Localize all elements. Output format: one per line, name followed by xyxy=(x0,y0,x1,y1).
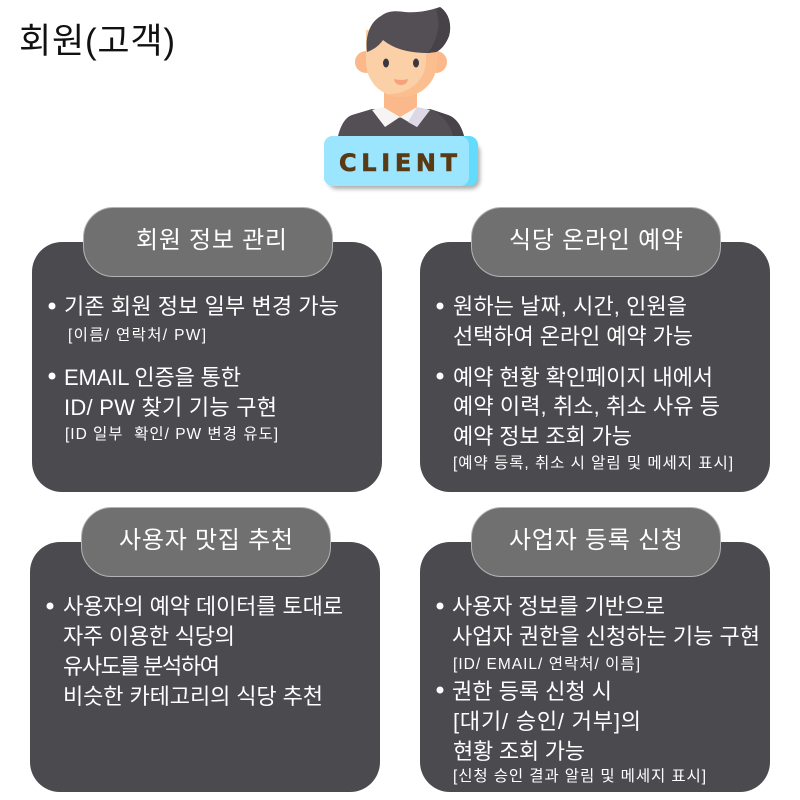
text block: business authority request: 사업자 권한을 신청하는 기능 구현 xyxy=(452,624,760,649)
panel background xyxy=(420,542,770,792)
text block: request status xyxy=(436,679,706,785)
badge shadow xyxy=(328,143,480,189)
text block: booking status: 예약 현황 확인페이지 내에서 xyxy=(453,365,713,390)
text block: online booking: 선택하여 온라인 예약 가능 xyxy=(453,324,693,349)
text block: recommendation: 사용자의 예약 데이터를 토대로 xyxy=(63,594,343,619)
text block: profile editing: [이름/ 연락처/ PW] xyxy=(68,326,206,344)
text block: booking status xyxy=(436,365,733,472)
text block: email verification: [ID 일부 확인/ PW 변경 유도] xyxy=(65,425,278,443)
icon: client avatar xyxy=(324,7,480,189)
heading: 회원 정보 관리 xyxy=(136,227,287,254)
badge xyxy=(324,136,478,186)
text block: online booking: 원하는 날짜, 시간, 인원을 xyxy=(453,294,687,319)
text block: recommendation xyxy=(46,594,343,709)
text block: request status: 현황 조회 가능 xyxy=(453,739,585,764)
icon: hair xyxy=(367,7,450,53)
icon: neck xyxy=(384,88,417,118)
text block: recommendation: 비슷한 카테고리의 식당 추천 xyxy=(63,684,323,709)
heading: 사용자 맛집 추천 xyxy=(119,527,293,554)
text block: request status: [신청 승인 결과 알림 및 메세지 표시] xyxy=(453,767,706,785)
text block: recommendation: 유사도를 분석하여 xyxy=(63,654,220,679)
text block: business authority request xyxy=(436,594,760,673)
panel: 사업자 등록 신청 xyxy=(420,508,770,792)
text block: booking status: 예약 이력, 취소, 취소 사유 등 xyxy=(453,394,720,419)
text block: booking status: [예약 등록, 취소 시 알림 및 메세지 표시] xyxy=(453,454,733,472)
title: 회원(고객) xyxy=(19,22,175,61)
text block: profile editing xyxy=(48,294,339,344)
text block: email verification: EMAIL 인증을 통한 xyxy=(64,365,241,390)
text block: online booking xyxy=(436,294,693,349)
text block: recommendation: 자주 이용한 식당의 xyxy=(63,624,235,649)
heading pill xyxy=(472,508,720,576)
panel background xyxy=(32,242,382,492)
text block: booking status: 예약 정보 조회 가능 xyxy=(453,424,632,449)
heading: 식당 온라인 예약 xyxy=(509,227,683,254)
panel: 회원 정보 관리 xyxy=(32,208,382,492)
text block: email verification: ID/ PW 찾기 기능 구현 xyxy=(64,395,277,420)
text block: request status: 권한 등록 신청 시 xyxy=(452,679,612,704)
panel: 식당 온라인 예약 xyxy=(420,208,770,492)
panel: 사용자 맛집 추천 xyxy=(30,508,380,792)
heading pill xyxy=(82,508,330,576)
panel background xyxy=(30,542,380,792)
text block: business authority request: [ID/ EMAIL/ 연락처/ 이름] xyxy=(453,655,640,673)
text block: request status: [대기/ 승인/ 거부]의 xyxy=(453,709,641,734)
badge label: CLIENT xyxy=(339,149,458,177)
icon: collar xyxy=(372,107,430,127)
heading: 사업자 등록 신청 xyxy=(509,527,683,554)
text block: business authority request: 사용자 정보를 기반으로 xyxy=(452,594,665,619)
icon: shoulders xyxy=(338,109,464,136)
panel background xyxy=(420,242,770,492)
icon: face xyxy=(366,30,437,97)
text block: email verification xyxy=(48,365,278,443)
icon: ears xyxy=(355,51,377,73)
heading pill xyxy=(472,208,720,276)
icon: eyes and mouth xyxy=(383,58,389,68)
heading pill xyxy=(84,208,332,276)
text block: profile editing: 기존 회원 정보 일부 변경 가능 xyxy=(64,294,339,319)
